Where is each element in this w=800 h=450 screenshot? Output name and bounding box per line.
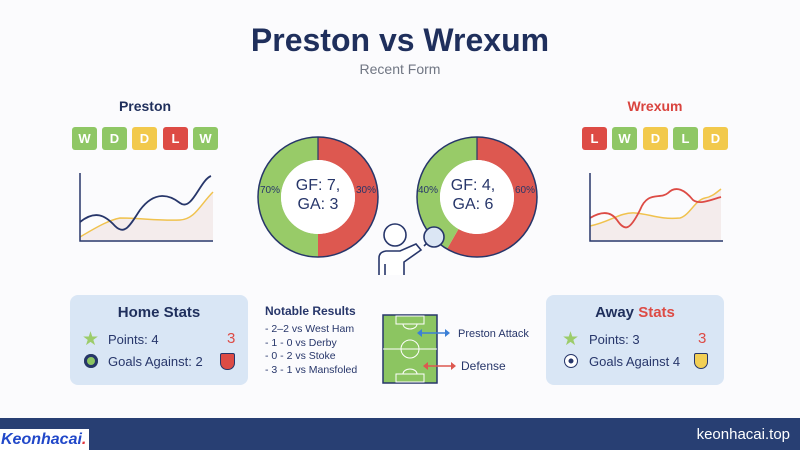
heading: Preston: Preston [119, 98, 171, 114]
form badges: Wrexum: W [618, 131, 631, 146]
donut: Wrexum: GA: 6 [453, 196, 494, 213]
form badges: Preston: D [140, 131, 149, 146]
form badges: Preston [72, 127, 218, 150]
form badges: Wrexum: L [591, 131, 598, 146]
notable results: - 2–2 vs West Ham [265, 323, 354, 335]
panel: Home Stats: Home Stats [118, 304, 200, 321]
donut: Preston: GA: 3 [298, 196, 339, 213]
footer [0, 418, 800, 450]
panel: Away Stats: Away Stats [595, 304, 675, 321]
panel: Home Stats [70, 295, 248, 385]
donut: Preston: 30% [356, 185, 376, 196]
form badges: Wrexum: L [682, 131, 689, 146]
site url: keonhacai.top [697, 426, 790, 443]
donut: Preston [258, 137, 378, 257]
notable results: - 3 - 1 vs Mansfoled [265, 364, 357, 376]
donut: Wrexum: 40% [418, 185, 438, 196]
graphics: Preston Attack [458, 328, 529, 340]
pitch [383, 315, 437, 383]
form badges: Wrexum: D [711, 131, 720, 146]
panel: Home Stats: 3 [227, 330, 235, 347]
donut: Preston: GF: 7, [296, 177, 340, 194]
form badges: Wrexum: D [651, 131, 660, 146]
panel: Away Stats [546, 295, 724, 385]
panel: Home Stats: Goals Against: 2 [108, 354, 203, 369]
notable results: - 0 - 2 vs Stoke [265, 350, 336, 362]
donut: Wrexum [417, 137, 537, 257]
panel: Away Stats: Points: 3 [589, 332, 640, 347]
notable results: Notable Results [265, 304, 356, 318]
arrow: Defense [423, 362, 456, 370]
logo: Keonhacai. [1, 431, 86, 448]
donut: Preston: 70% [260, 185, 280, 196]
panel: Away Stats: ★ [562, 329, 579, 350]
form badges: Preston: W [78, 131, 91, 146]
graphics: Defense [461, 359, 506, 373]
panel: Away Stats: 3 [698, 330, 706, 347]
form badges: Preston: L [172, 131, 179, 146]
panel: Home Stats: Points: 4 [108, 332, 159, 347]
notable results [265, 304, 357, 376]
form badges: Wrexum [582, 127, 728, 150]
title: Preston vs Wrexum [251, 22, 549, 58]
icon: analyst with magnifier [379, 224, 444, 275]
chart: Wrexum [590, 173, 723, 241]
arrow: Preston Attack [417, 329, 450, 337]
notable results: - 1 - 0 vs Derby [265, 336, 337, 348]
form badges: Preston: D [110, 131, 119, 146]
panel: Home Stats: ★ [82, 329, 99, 350]
donut: Wrexum: 60% [515, 185, 535, 196]
donut: Wrexum: GF: 4, [451, 177, 495, 194]
chart: Preston [80, 173, 213, 241]
subtitle: Recent Form [360, 61, 440, 77]
form badges: Preston: W [199, 131, 212, 146]
panel: Away Stats: Goals Against 4 [589, 354, 680, 369]
heading: Wrexum: Wrexum [628, 98, 682, 114]
